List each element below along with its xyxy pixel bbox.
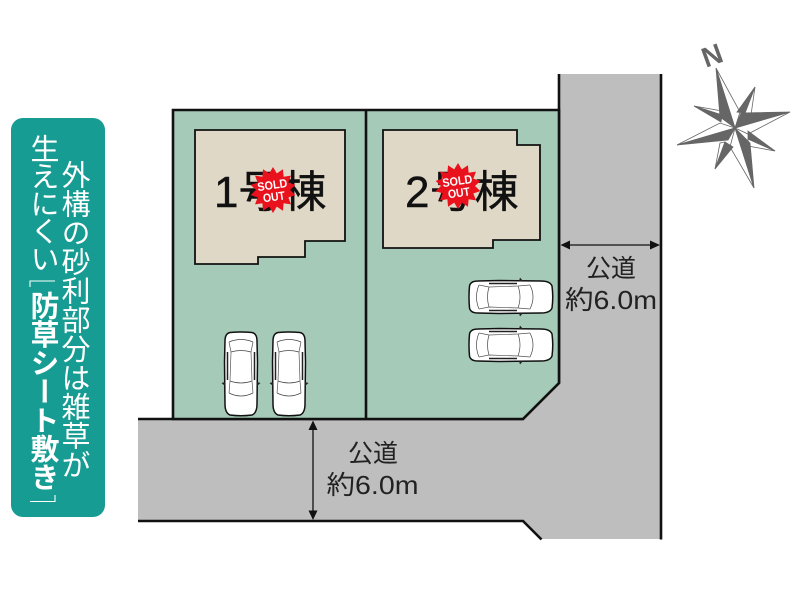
car: lot 2 lower — [469, 326, 553, 364]
building 1 — [195, 130, 345, 264]
note text: line 1: 生えにくい — [26, 134, 58, 272]
note text: line 2: 外構の砂利部分は雑草が — [57, 160, 90, 479]
sold out badge 1: SOLD — [256, 176, 288, 194]
sold out badge 1 — [246, 163, 300, 217]
sold out badge 2 — [431, 159, 485, 213]
road label: side: 公道 — [586, 255, 636, 283]
arrow: side road width — [560, 240, 660, 250]
site lots — [173, 110, 559, 419]
road label: front: 公道 — [348, 440, 398, 468]
sold out badge 1: OUT — [262, 188, 286, 205]
road label: front: 約6.0m — [326, 470, 418, 500]
road — [138, 74, 661, 540]
road label: side — [565, 255, 657, 315]
car: lot 2 upper — [469, 278, 553, 316]
label: building 2: 2号棟 — [405, 168, 519, 217]
building 2 — [383, 130, 540, 248]
note bracket: close — [30, 495, 55, 502]
car: lot 1 right — [270, 332, 308, 416]
arrow: front road width — [308, 420, 318, 520]
compass letter N: N — [697, 37, 727, 73]
compass — [677, 37, 790, 188]
sold out badge 2: OUT — [447, 184, 471, 201]
road label: front — [326, 440, 418, 500]
label: building 1: 1号棟 — [214, 168, 326, 217]
road label: side: 約6.0m — [565, 285, 657, 315]
car: lot 1 left — [222, 332, 260, 416]
sold out badge 2: SOLD — [441, 172, 473, 190]
panel: note — [11, 118, 105, 517]
note text: emphasis: 防草シート敷き — [26, 291, 60, 491]
note bracket: open — [30, 281, 55, 287]
